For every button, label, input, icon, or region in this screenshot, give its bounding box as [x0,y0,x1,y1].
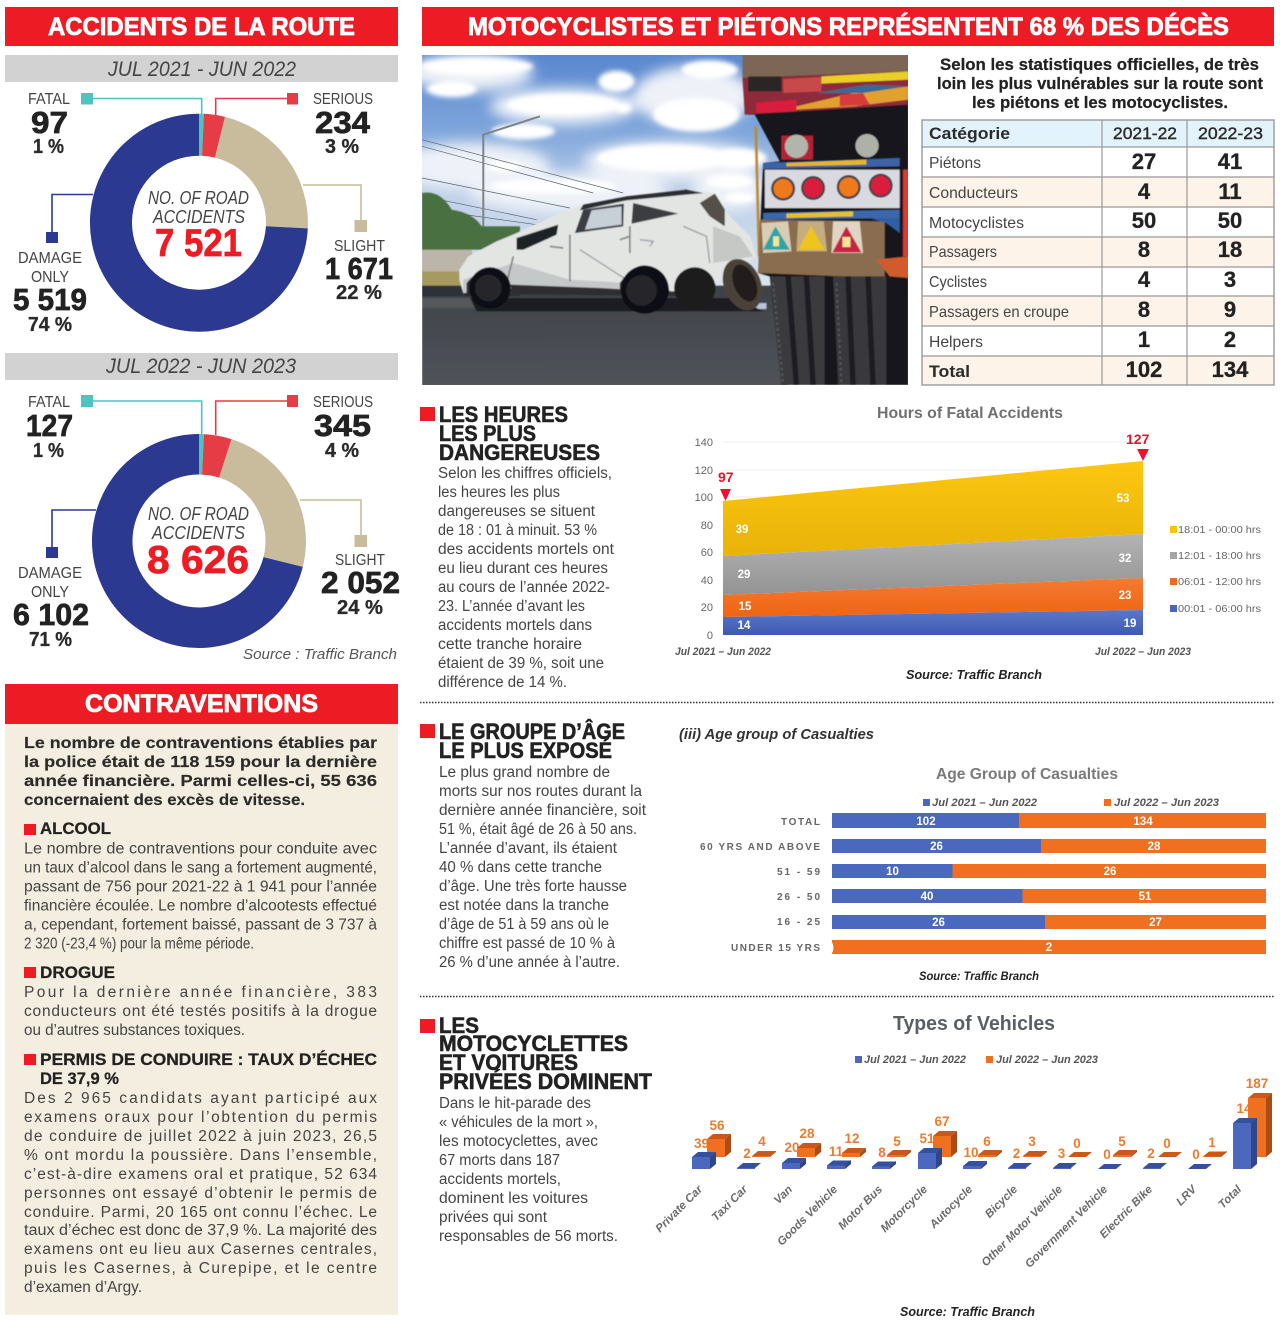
text block: alcool: ALCOOL [40,819,111,838]
lamp post [483,116,540,246]
bar chart: age group of casualties [679,726,1266,983]
intro text: vulnérables: les piétons et les motocyclistes. [972,93,1228,112]
area chart: hours of fatal accidents: 32 [1119,553,1131,565]
callout: slight 2052 [300,500,400,619]
category labels: Van [772,1184,795,1207]
area chart: hours of fatal accidents: 00:01 - 06:00 hrs [1178,603,1261,615]
table: categories of victims: Piétons [929,155,981,172]
table: categories of victims: 50 [1132,208,1156,233]
text block: permis de conduire: examens ont eu lieu aux Casernes centrales, [24,1241,377,1258]
table: categories of victims: Cyclistes [929,274,987,291]
text block: permis de conduire: c’est-à-dire examens oral et pratique, 52 634 [24,1166,377,1183]
section: les heures les plus dangereuses: cette tranche horaire [438,636,582,653]
section: les heures les plus dangereuses: des accidents mortels ont [438,541,615,558]
panel: contraventions [5,684,398,1315]
section: les heures les plus dangereuses: Selon les chiffres officiels, [438,465,612,482]
text block: alcool: financière écoulée. Le nombre d’alcootests effectué [24,898,377,914]
orange series values: 0 [1073,1136,1081,1151]
orange series bars [707,1093,1272,1157]
area chart: hours of fatal accidents: 140 [695,437,713,449]
table: categories of victims: 18 [1218,237,1242,262]
callout: serious 345: 345 [314,408,371,443]
callout: serious 234: SERIOUS [313,91,373,108]
callout: slight 2052: 24 % [337,597,383,619]
text block: alcool: Le nombre de contraventions pour conduite avec [24,840,377,858]
bar chart: age group of casualties: 2 [1046,942,1052,954]
area chart: hours of fatal accidents: 39 [736,524,748,536]
callout: slight 1671 [303,185,393,304]
donut chart 2022-23 [92,434,306,648]
panel: road accidents 2022-2023 [5,353,400,663]
text block: drogue: ou d’autres substances toxiques. [24,1022,245,1039]
panel: road accidents 2021-2022 [5,55,398,336]
section: les heures les plus dangereuses: dangereuses se situent [438,503,596,520]
blue series values: 14 [1236,1101,1252,1116]
text block: alcool: 2 320 (-23,4 %) pour la même période. [24,936,254,952]
category labels: Motorcycle [879,1183,931,1235]
section: les heures les plus dangereuses: LES HEURES [439,402,568,427]
section: les heures les plus dangereuses: 23. L’année d’avant les [438,598,585,615]
category labels: Other Motor Vehicle [980,1183,1066,1269]
text block: permis de conduire: examens oraux pour l’obtention du permis [24,1109,377,1126]
section: les heures les plus dangereuses: eu lieu durant ces heures [438,560,608,577]
bar chart: age group of casualties: 26 [930,841,943,853]
blue series values: 0 [1192,1147,1200,1162]
table: categories of victims: 9 [1224,297,1236,322]
table: categories of victims: 102 [1126,357,1162,382]
section: le groupe d'âge le plus exposé: Le plus grand nombre de [439,764,610,781]
heading: motocyclistes et piétons [422,7,1274,46]
bar chart: age group of casualties: Jul 2021 – Jun 2022 [932,797,1037,809]
area chart: hours of fatal accidents [675,405,1261,682]
callout: damage only 6102: 6 102 [13,597,89,632]
bar chart: age group of casualties: 40 [921,891,933,903]
callout: serious 234 [216,91,373,158]
3d bar chart: types of vehicles [654,1013,1272,1319]
orange series values: 28 [799,1126,815,1141]
area chart: hours of fatal accidents: 12:01 - 18:00 hrs [1178,550,1261,562]
section: le groupe d'âge le plus exposé: LE GROUPE D’ÂGE [439,719,625,744]
callout: damage only 5519: ONLY [31,269,69,286]
orange series values: 5 [893,1134,901,1149]
category labels: Bicycle [983,1183,1021,1221]
bar chart: age group of casualties: 26 [932,917,945,929]
table: categories of victims: Total [929,362,970,381]
section: le groupe d'âge le plus exposé: 26 % d’une année à l’autre. [439,954,620,971]
orange series values [709,1076,1268,1151]
area chart: hours of fatal accidents: 23 [1119,590,1131,602]
bar chart: age group of casualties: Source: Traffic Branch [919,969,1039,983]
blue series values: 2 [1147,1146,1155,1161]
category labels: Government Vehicle [1023,1183,1111,1270]
table: categories of victims: Motocyclistes [929,215,1024,232]
bar chart: age group of casualties: 102 [916,816,936,828]
section: les motocyclettes et voitures privées dominent: les motocyclettes, avec [439,1133,598,1150]
table: categories of victims: 4 [1138,179,1151,204]
bar chart: age group of casualties: 26 - 50 [777,892,820,903]
truck [742,55,908,385]
section: le groupe d'âge le plus exposé: 40 % dans cette tranche [439,859,602,876]
section: les heures les plus dangereuses: étaient de 39 %, soit une [438,655,604,672]
section: les heures les plus dangereuses: différence de 14 %. [438,674,567,691]
area chart: hours of fatal accidents: 20 [701,602,713,614]
section: le groupe d'âge le plus exposé: 51 %, était âgé de 26 à 50 ans. [439,821,637,838]
table: categories of victims: 3 [1224,267,1236,292]
blue series values: 3 [1058,1146,1066,1161]
area chart: hours of fatal accidents: 120 [695,465,713,477]
donut chart 2021-22 [90,114,308,332]
table: categories of victims: Passagers [929,244,997,261]
section: les motocyclettes et voitures privées dominent: accidents mortels, [439,1171,561,1188]
area chart: hours of fatal accidents: Jul 2022 – Jun 2023 [1095,646,1191,658]
text block: permis de conduire [24,1050,377,1296]
callout: slight 1671: 22 % [336,282,382,304]
callout: slight 2052: SLIGHT [335,552,385,569]
source note: Source : Traffic Branch [243,646,397,663]
orange series values: 1 [1208,1135,1216,1150]
text block: permis de conduire: % ont mordu la poussière. Dans l’ensemble, [24,1147,377,1164]
area chart: hours of fatal accidents: Hours of Fatal Accidents [877,405,1063,422]
table: categories of victims: 4 [1138,267,1151,292]
category labels: LRV [1174,1183,1200,1208]
callout: serious 345: 4 % [325,440,359,462]
text block: permis de conduire: taux d’échec est donc de 37,9 %. La majorité des [24,1222,377,1239]
text block: permis de conduire: d’examen d’Argy. [24,1279,142,1296]
bar chart: age group of casualties: UNDER 15 YRS [731,943,820,954]
text block: drogue: Pour la dernière année financière, 383 [24,984,377,1001]
heading: motocyclistes et piétons: MOTOCYCLISTES ET PIÉTONS REPRÉSENTENT 68 % DES DÉCÈS [468,12,1229,41]
intro text [24,735,377,809]
bar chart: age group of casualties: 10 [886,866,899,878]
category labels [654,1183,1245,1270]
table: categories of victims: 2022-23 [1198,124,1263,143]
section: le groupe d'âge le plus exposé: d’âge de 51 à 59 ans où le [439,916,609,933]
blue series values: 2 [743,1146,751,1161]
orange series values: 12 [844,1131,860,1146]
category labels: Autocycle [927,1183,976,1232]
area chart: hours of fatal accidents: 15 [739,601,752,613]
callout: fatal 127: FATAL [28,394,70,411]
section: les heures les plus dangereuses: de 18 : 01 à minuit. 53 % [438,522,597,539]
power lines [422,140,623,225]
bar chart: age group of casualties: 16 - 25 [777,917,820,928]
donut chart 2021-22: NO. OF ROAD [148,188,249,208]
callout: fatal 97: 97 [31,105,68,140]
area chart: hours of fatal accidents: 40 [701,575,713,587]
section: le groupe d'âge le plus exposé: dernière année financière, soit [439,802,647,819]
blue series values: 2 [1013,1146,1020,1161]
donut chart 2022-23: NO. OF ROAD [148,504,249,524]
table: categories of victims: 8 [1138,297,1150,322]
category labels: Electric Bike [1098,1183,1156,1241]
text block: drogue: conducteurs ont été testés positifs à la drogue [24,1003,377,1020]
table: categories of victims: 27 [1132,149,1156,174]
3d bar chart: types of vehicles: Jul 2022 – Jun 2023 [996,1054,1098,1066]
section: les heures les plus dangereuses: les heures les plus [438,484,560,501]
text block: alcool: a, cependant, fortement baissé, passant de 3 737 à [24,916,377,934]
heading: contraventions: CONTRAVENTIONS [85,690,318,718]
bar chart: age group of casualties: 28 [1148,841,1161,853]
category labels: Taxi Car [710,1183,750,1224]
blue series values: 10 [963,1145,979,1160]
area chart: hours of fatal accidents: 53 [1117,493,1129,505]
callout: damage only 6102: DAMAGE [18,565,82,582]
bar chart: age group of casualties: 27 [1149,917,1162,929]
bar chart: age group of casualties: Jul 2022 – Jun 2023 [1114,797,1219,809]
blue series bars [692,1118,1257,1169]
category labels: Motor Bus [836,1184,885,1232]
area chart: hours of fatal accidents: Source: Traffic Branch [906,667,1042,682]
bar chart: age group of casualties: 134 [1133,816,1153,828]
orange series values: 3 [1028,1134,1036,1149]
bar chart: age group of casualties: (iii) Age group of Casualties [679,726,874,743]
callout: serious 345: SERIOUS [313,394,373,411]
section: le groupe d'âge le plus exposé [420,719,647,971]
callout: fatal 127: 1 % [33,440,64,462]
callout: slight 1671: 1 671 [325,251,393,286]
table: categories of victims [922,120,1274,385]
bar chart: age group of casualties: TOTAL [781,817,820,828]
callout: damage only 5519 [13,194,93,336]
intro text: vulnérables: loin les plus vulnérables sur la route sont [937,74,1263,93]
blue series values: 20 [784,1140,800,1155]
text block: permis de conduire: puis les Casernes, à Curepipe, et le centre [24,1260,377,1277]
callout: damage only 5519: DAMAGE [18,250,82,267]
area chart: hours of fatal accidents: 06:01 - 12:00 hrs [1178,576,1261,588]
panel: road accidents 2021-2022: JUL 2021 - JUN 2022 [107,58,296,81]
table: categories of victims: 1 [1138,327,1150,352]
callout: damage only 6102 [13,510,96,651]
text block: drogue: DROGUE [40,963,115,982]
intro text: vulnérables: Selon les statistiques officielles, de très [940,55,1259,74]
text block: permis de conduire: PERMIS DE CONDUIRE : TAUX D’ÉCHEC [40,1050,377,1069]
intro text: concernaient des excès de vitesse. [24,792,305,809]
intro text: année financière. Parmi celles-ci, 55 636 [24,773,377,790]
category labels: Total [1217,1183,1245,1211]
bar chart: age group of casualties: 26 [1104,866,1116,878]
text block: alcool: passant de 756 pour 2021-22 à 1 941 pour l’année [24,878,377,896]
heading: accidents de la route [5,7,398,46]
table: categories of victims: Conducteurs [929,185,1018,202]
orange series values: 5 [1118,1134,1126,1149]
callout: damage only 5519: 74 % [28,314,72,336]
text block: permis de conduire: de conduire de juillet 2022 à juin 2023, 26,5 [24,1128,377,1145]
text block: permis de conduire: personnes ont essayé d’obtenir le permis de [24,1185,377,1202]
section: le groupe d'âge le plus exposé: chiffre est passé de 10 % à [439,935,615,952]
3d bar chart: types of vehicles: Jul 2021 – Jun 2022 [864,1054,966,1066]
section: les motocyclettes et voitures privées dominent: privées qui sont [439,1209,548,1226]
section: les heures les plus dangereuses: au cours de l’année 2022- [438,579,610,596]
section: les motocyclettes et voitures privées dominent: « véhicules de la mort », [439,1114,598,1131]
callout: fatal 97: 1 % [33,136,64,158]
3d bar chart: types of vehicles: Source: Traffic Branch [900,1304,1035,1319]
bar chart: age group of casualties: 60 YRS AND ABOVE [700,842,820,853]
callout: serious 234: 234 [315,105,371,140]
area chart: hours of fatal accidents: 127 [1126,431,1150,447]
donut chart 2022-23: ACCIDENTS [151,523,245,543]
text block: drogue [24,963,377,1039]
orange series values: 187 [1246,1076,1268,1091]
panel: road accidents 2022-2023: JUL 2022 - JUN 2023 [105,355,296,378]
bar chart: age group of casualties: ) [830,942,834,954]
section: les motocyclettes et voitures privées dominent: MOTOCYCLETTES [439,1031,628,1056]
section: les motocyclettes et voitures privées dominent: Dans le hit-parade des [439,1095,591,1112]
heading: accidents de la route: ACCIDENTS DE LA ROUTE [48,13,355,41]
table: categories of victims: Catégorie [929,124,1010,143]
table: categories of victims: Helpers [929,334,983,351]
orange series values: 56 [709,1118,725,1133]
section: les motocyclettes et voitures privées dominent: 67 morts dans 187 [439,1152,560,1169]
blue series values: 51 [919,1131,935,1146]
category labels: Private Car [654,1183,705,1235]
callout: slight 2052: 2 052 [321,565,400,600]
table: categories of victims: 11 [1218,179,1242,204]
section: le groupe d'âge le plus exposé: d’âge. Une très forte hausse [439,878,627,895]
callout: damage only 5519: 5 519 [13,282,87,317]
bar chart: age group of casualties: 51 [1139,891,1152,903]
callout: serious 345 [216,394,373,462]
text block: permis de conduire: Des 2 965 candidats ayant participé aux [24,1090,377,1107]
section: le groupe d'âge le plus exposé: LE PLUS EXPOSÉ [439,738,612,763]
text block: permis de conduire: DE 37,9 % [40,1069,119,1088]
area chart: hours of fatal accidents: 97 [718,469,734,485]
section: les motocyclettes et voitures privées dominent: LES [439,1013,479,1038]
area chart: hours of fatal accidents: 60 [701,547,713,559]
blue series values: 0 [1103,1147,1111,1162]
section: les motocyclettes et voitures privées dominent [420,1013,653,1245]
section: les heures les plus dangereuses: accidents mortels dans [438,617,592,634]
bar chart: age group of casualties: Age Group of Casualties [936,766,1118,783]
callout: fatal 97 [28,91,202,158]
orange series values: 0 [1163,1136,1171,1151]
heading: contraventions [5,684,398,724]
area chart: hours of fatal accidents: 80 [701,520,713,532]
table: categories of victims: 2021-22 [1113,124,1177,143]
section: les heures les plus dangereuses: LES PLUS [439,421,536,446]
section: le groupe d'âge le plus exposé: morts sur nos routes durant la [439,783,642,800]
orange series values: 6 [983,1134,991,1149]
section: les motocyclettes et voitures privées dominent: ET VOITURES [439,1050,578,1075]
text block: alcool: un taux d’alcool dans le sang a fortement augmenté, [24,860,377,876]
blue series values: 11 [829,1144,844,1159]
section: les motocyclettes et voitures privées dominent: responsables de 56 morts. [439,1228,618,1245]
blue series values: 8 [878,1145,886,1160]
section: les heures les plus dangereuses [420,402,615,691]
callout: serious 234: 3 % [325,136,359,158]
callout: fatal 127: 127 [26,408,73,443]
area chart: hours of fatal accidents: Jul 2021 – Jun 2022 [675,646,771,658]
section: les motocyclettes et voitures privées dominent: PRIVÉES DOMINENT [439,1069,653,1094]
area chart: hours of fatal accidents: 19 [1124,618,1136,630]
blue series values: 39 [694,1136,709,1151]
callout: damage only 6102: 71 % [29,629,72,651]
photo: wrecked car and truck [390,55,908,386]
donut chart 2022-23: 8 626 [147,539,249,582]
section: le groupe d'âge le plus exposé: est notée dans la tranche [439,897,609,914]
area chart: hours of fatal accidents: 14 [738,620,751,632]
orange series values: 4 [758,1134,766,1149]
callout: fatal 127 [26,394,202,462]
table: categories of victims: 2 [1224,327,1236,352]
table: categories of victims: 8 [1138,237,1150,262]
table: categories of victims: 41 [1218,149,1242,174]
callout: slight 1671: SLIGHT [334,238,385,255]
table: categories of victims: Passagers en croupe [929,304,1069,321]
area chart: hours of fatal accidents: 100 [695,492,713,504]
text block: alcool [24,819,377,952]
intro text: vulnérables [937,55,1263,112]
3d bar chart: types of vehicles: Types of Vehicles [893,1013,1055,1035]
area chart: hours of fatal accidents: 18:01 - 00:00 hrs [1178,524,1261,536]
orange series values: 67 [934,1114,950,1129]
callout: damage only 6102: ONLY [31,584,69,601]
table: categories of victims: 50 [1218,208,1242,233]
intro text: la police était de 118 159 pour la dernière [24,754,377,771]
donut chart 2021-22: 7 521 [155,222,242,265]
area chart: hours of fatal accidents: 0 [707,630,713,642]
section: les motocyclettes et voitures privées dominent: dominent les voitures [439,1190,588,1207]
section: les heures les plus dangereuses: DANGEREUSES [439,440,600,465]
section: le groupe d'âge le plus exposé: L’année d’avant, ils étaient [439,840,618,857]
text block: permis de conduire: conduire. Parmi, 20 165 ont connu l’échec. Le [24,1204,377,1221]
table: categories of victims: 134 [1212,357,1249,382]
intro text: Le nombre de contraventions établies par [24,735,377,752]
category labels: Goods Vehicle [775,1183,841,1248]
donut chart 2021-22: ACCIDENTS [152,207,245,227]
blue series values [694,1101,1252,1162]
bar chart: age group of casualties: 51 - 59 [777,867,820,878]
area chart: hours of fatal accidents: 29 [738,569,750,581]
callout: fatal 97: FATAL [28,91,70,108]
